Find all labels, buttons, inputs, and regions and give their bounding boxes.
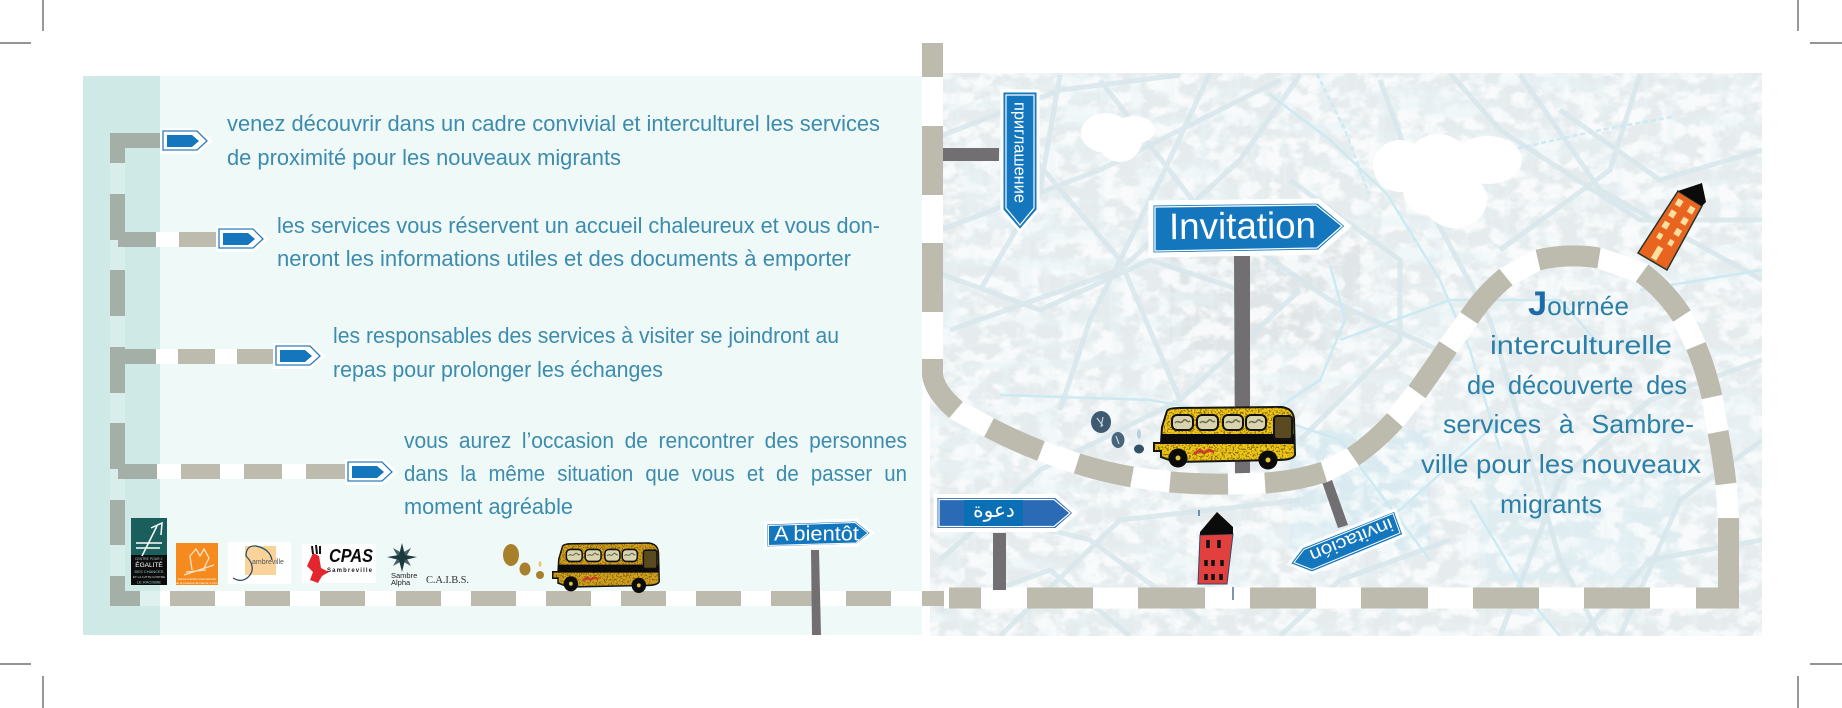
icon: big bus (1154, 407, 1295, 470)
cloud large (1373, 134, 1522, 228)
text block 4: dans la même situation que vous et de passer un (404, 461, 907, 486)
text block 3: les responsables des services à visiter se joindront au (333, 323, 839, 348)
icon: big bus smoke (1091, 411, 1144, 454)
title: journée interculturelle: migrants (1500, 489, 1602, 519)
icon: arrow 3 (273, 343, 326, 369)
pole: russian sign (943, 148, 999, 161)
icon: small bus (553, 543, 659, 593)
sign: arabic: دعوة (973, 498, 1015, 522)
logo: sambreville (228, 542, 291, 584)
panel: map background (930, 73, 1762, 636)
title: journée interculturelle: interculturelle (1490, 330, 1672, 360)
pole: arabic sign (993, 533, 1006, 590)
logo: centre d'action interculturelle: de la province de Namur a.s.b.l. (176, 581, 218, 585)
road: right map section (932, 43, 1728, 598)
pole: a bientot (811, 550, 821, 635)
logo: sambre alpha: Alpha (391, 578, 411, 587)
logo: centre pour l'égalité des chances (131, 518, 167, 585)
icon: arrow 4 (345, 459, 398, 485)
logo: CPAS: Sambreville (327, 568, 373, 574)
logo: centre d'action interculturelle (176, 543, 218, 585)
logo: CAIBS: C.A.I.B.S. (426, 575, 469, 586)
road: left panel section (110, 133, 944, 606)
text block 3: repas pour prolonger les échanges (333, 357, 663, 382)
logo: centre pour l'égalité des chances: LE RACISME (137, 580, 161, 584)
title: journée interculturelle (1421, 285, 1701, 519)
sign: russian: приглашение (1010, 102, 1030, 203)
text block 3 (333, 323, 839, 382)
logo: centre pour l'égalité des chances: DES CHANCES (135, 569, 164, 574)
text block 1 (227, 111, 880, 170)
logo: CPAS: CPAS (329, 546, 373, 566)
title: journée interculturelle: ville pour les nouveaux (1421, 449, 1701, 479)
icon: small bus smoke (503, 544, 544, 579)
title: journée interculturelle: de découverte des (1467, 370, 1687, 400)
text block 4: moment agréable (404, 494, 573, 519)
sign: russian (1002, 91, 1038, 231)
logo: sambre alpha: Sambre (391, 571, 417, 580)
sign: arabic (936, 496, 1075, 530)
logo: centre pour l'égalité des chances: ÉGALITÉ (135, 560, 163, 569)
icon: arrow 1 (160, 128, 213, 154)
logo: sambre alpha (387, 543, 417, 587)
icon: arrow 2 (216, 226, 269, 252)
icon: orange house (1638, 183, 1706, 270)
text block 4: vous aurez l’occasion de rencontrer des personnes (404, 428, 907, 453)
pole: invitation (1234, 256, 1250, 474)
text block 2: les services vous réservent un accueil chaleureux et vous don- (277, 213, 880, 238)
sign: rotated invitacion: invitación (1307, 514, 1396, 566)
title: journée interculturelle: services à Sambre- (1443, 409, 1694, 439)
text block 4 (404, 428, 907, 519)
panel: left text background (83, 76, 922, 635)
logo: centre pour l'égalité des chances: CENTRE POUR L’ (135, 557, 163, 561)
logo: sambreville: ambreville (252, 559, 284, 566)
sign: a bientot: A bientôt (774, 524, 859, 546)
sign: rotated invitacion (1289, 510, 1404, 573)
sign: a bientot (766, 520, 872, 548)
sign: invitation main: Invitation (1169, 205, 1316, 247)
cloud small (1081, 113, 1155, 162)
pole: rotated sign (1322, 480, 1348, 528)
text block 1: de proximité pour les nouveaux migrants (227, 145, 621, 170)
text block 2: neront les informations utiles et des documents à emporter (277, 246, 851, 271)
logo: CPAS (302, 544, 376, 583)
icon: red house (1198, 510, 1233, 600)
title: journée interculturelle: Journée (1528, 285, 1629, 323)
text block 2 (277, 213, 880, 271)
text block 1: venez découvrir dans un cadre convivial et interculturel les services (227, 111, 880, 136)
logo: centre d'action interculturelle: Centre d’action interculturelle (178, 577, 217, 581)
sign: invitation main (1151, 201, 1348, 255)
logo: centre pour l'égalité des chances: ET LA LUTTE CONTRE (133, 575, 165, 579)
